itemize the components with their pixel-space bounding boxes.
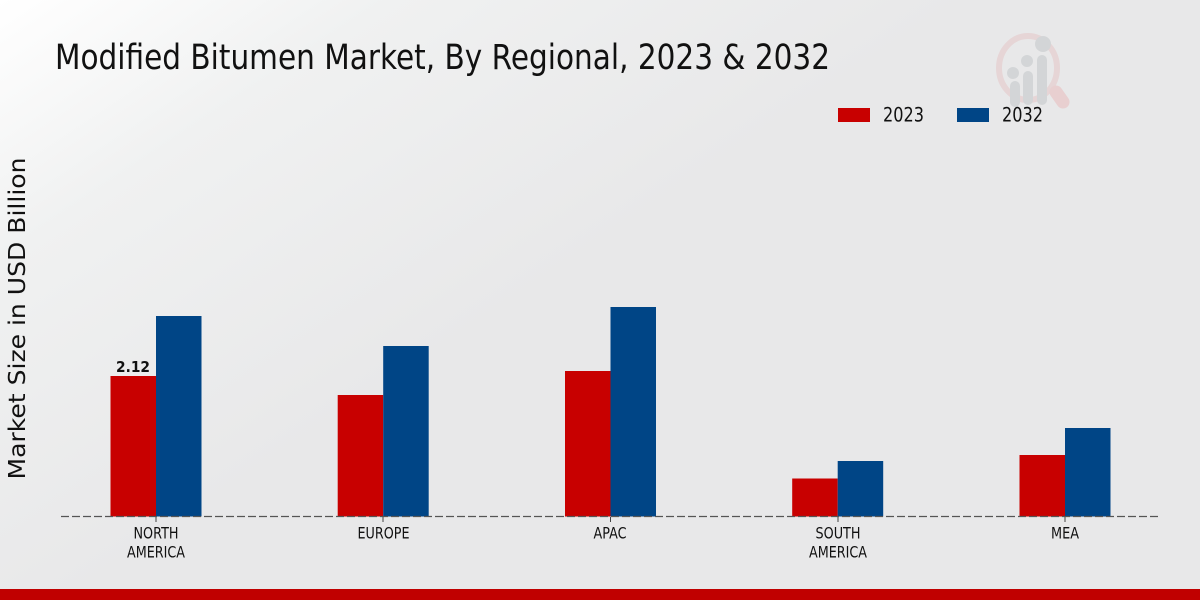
y axis title: Market Size in USD Billion bbox=[3, 158, 31, 480]
label: North America bbox=[127, 517, 185, 562]
bars: APAC bbox=[565, 307, 656, 516]
label: MEA bbox=[1051, 517, 1079, 542]
legend bbox=[838, 104, 1043, 126]
legend swatch: 2023 bbox=[838, 108, 870, 122]
data label: 2.12: 2.12 bbox=[116, 358, 150, 376]
bars: South America bbox=[792, 461, 883, 516]
watermark logo icon bbox=[999, 36, 1063, 107]
axis baseline bbox=[61, 516, 1160, 518]
title: Modified Bitumen Market, By Regional, 2023 & 2032 bbox=[55, 38, 830, 78]
bottom red band bbox=[0, 589, 1200, 600]
label: MEA: MEA bbox=[1051, 524, 1079, 542]
legend label: 2023: 2023 bbox=[883, 104, 924, 126]
axis labels bbox=[127, 517, 1079, 562]
label: South America: SOUTH bbox=[816, 524, 860, 542]
label: APAC: APAC bbox=[594, 524, 626, 542]
bars: Europe bbox=[338, 346, 429, 516]
label: Europe bbox=[358, 517, 410, 542]
label: North America: NORTH bbox=[134, 524, 178, 542]
label: Europe: EUROPE bbox=[358, 524, 410, 542]
legend swatch: 2032 bbox=[957, 108, 989, 122]
legend label: 2032: 2032 bbox=[1002, 104, 1043, 126]
label: APAC bbox=[594, 517, 626, 542]
bars: MEA bbox=[1020, 428, 1110, 516]
label: North America: AMERICA bbox=[127, 542, 185, 562]
bars: North America bbox=[110, 316, 202, 516]
label: South America: AMERICA bbox=[809, 542, 867, 562]
bar chart bbox=[61, 307, 1160, 516]
label: South America bbox=[809, 517, 867, 562]
